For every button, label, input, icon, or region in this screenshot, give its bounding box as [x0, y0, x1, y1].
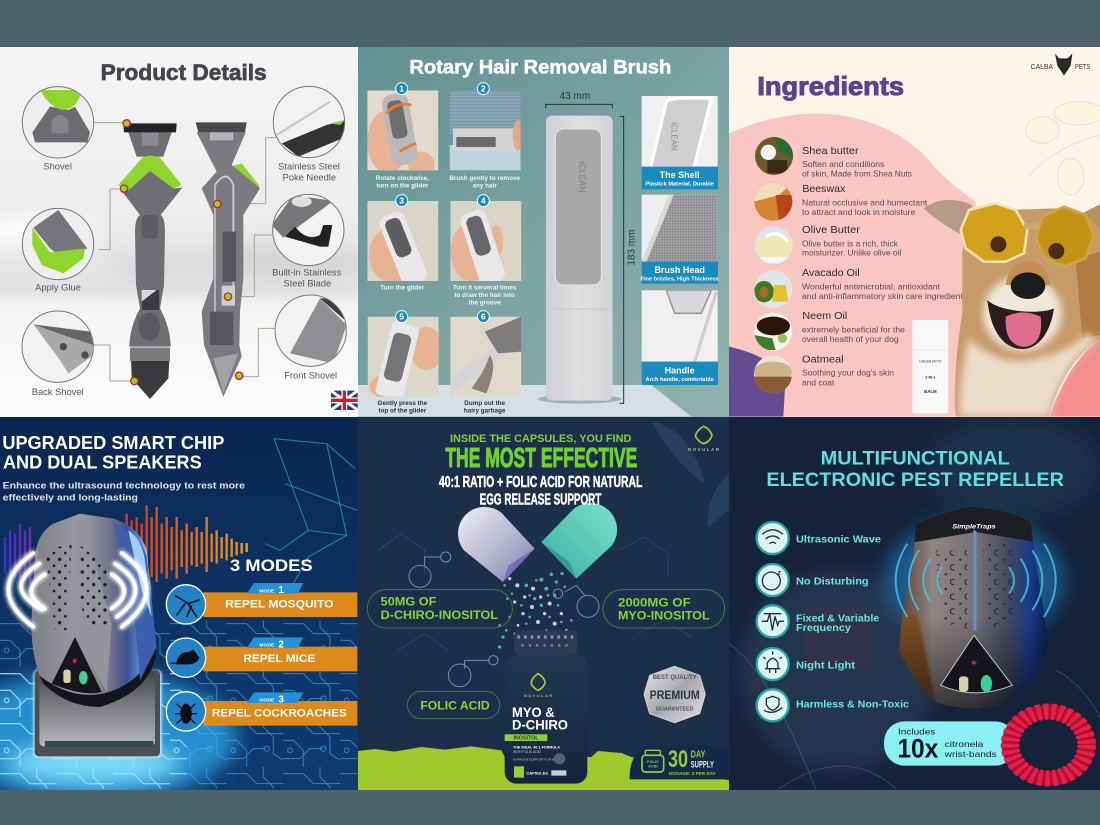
- mode 3: repel cockroaches: [166, 692, 357, 731]
- ingredient: neem oil: overall health of your dog: [802, 334, 899, 344]
- ingredient: avacado oil: Avacado Oil: [802, 268, 860, 279]
- step number badges: [396, 83, 489, 323]
- mode 1: repel mosquito: [166, 583, 357, 624]
- detail labels: Stainless Steel: [278, 161, 340, 171]
- supply badge: SUPPLY: [691, 760, 714, 770]
- stand: [33, 670, 162, 758]
- detail labels: Shovel: [43, 161, 72, 171]
- back view tool: [196, 122, 260, 397]
- bottle: HORMONE SUPPORT FOR WOMEN: [513, 757, 563, 761]
- marker dots: [120, 120, 243, 385]
- supply badge: DAY: [691, 750, 706, 761]
- ingredient: beeswax: Beeswax: [802, 184, 846, 195]
- detail labels: Front Shovel: [284, 370, 337, 380]
- premium badge: PREMIUM: [650, 688, 700, 702]
- repeller device: ✶: [70, 656, 79, 667]
- feature card: handle: Arch handle, comfortable: [646, 377, 714, 383]
- balm bottle: [912, 320, 948, 413]
- room backdrop: [729, 417, 1100, 789]
- feature: fixed and variable frequency: Fixed & Variable: [796, 614, 880, 625]
- pink background shape: [729, 114, 982, 417]
- step 2 photo: [450, 90, 523, 170]
- ingredient: olive butter: Olive Butter: [802, 225, 861, 236]
- feature: no disturbing: z: [778, 569, 782, 576]
- step numbers: 4: [481, 196, 486, 206]
- feature: no disturbing: [757, 564, 869, 596]
- subtitle: effectively and long-lasting: [3, 493, 138, 503]
- ingredient: olive butter: Olive butter is a rich, thick: [802, 238, 899, 248]
- step 3 photo: [367, 201, 438, 289]
- ingredient: shea butter: Shea butter: [802, 146, 859, 157]
- step captions: Turn it serveral times: [453, 285, 517, 292]
- feature: no disturbing: No Disturbing: [796, 576, 869, 587]
- title: multifunctional pest repeller: ELECTRONIC PEST REPELLER: [766, 470, 1064, 491]
- callout: myo-inositol: [603, 590, 725, 628]
- title: multifunctional pest repeller: MULTIFUNCTIONAL: [821, 448, 1010, 469]
- icon: uk flag: [331, 391, 358, 410]
- feature card: the shell: Plastick Material, Durable: [645, 181, 714, 187]
- sound arcs right: [112, 553, 147, 627]
- step captions: Turn the glider: [380, 285, 425, 292]
- wristband callout: wrist-bands: [943, 749, 997, 759]
- brand logo: [688, 426, 720, 452]
- ingredient: oatmeal: [754, 354, 894, 394]
- balm bottle: BALM: [924, 389, 937, 394]
- callout: folic acid: [407, 691, 500, 719]
- heading: 3 modes: 3 MODES: [230, 556, 313, 575]
- feature card: the shell: [642, 96, 718, 189]
- detail labels: Apply Glue: [35, 283, 81, 293]
- feature card: brush head: [641, 195, 720, 284]
- wristband callout: citronela: [945, 739, 984, 749]
- detail circle: shovel: [22, 87, 94, 158]
- step numbers: [399, 84, 486, 322]
- step numbers: 6: [481, 312, 486, 322]
- callout: folic acid: FOLIC ACID: [420, 699, 490, 713]
- step captions: Dump out the: [464, 400, 506, 407]
- step captions: hairy garbage: [464, 408, 506, 415]
- decorative leaves: [651, 420, 729, 527]
- wristband callout: [884, 721, 1016, 766]
- detail labels: [32, 161, 341, 397]
- mode 2: repel mice: [166, 637, 357, 677]
- connector lines: [93, 123, 277, 381]
- callout: d-chiro-inositol: [367, 590, 512, 628]
- subtitle: [3, 480, 245, 503]
- detail circle: front shovel: [275, 295, 347, 366]
- step captions: Brush gently to remove: [449, 175, 520, 182]
- main brush product: [538, 116, 621, 404]
- premium badge: [644, 666, 705, 723]
- heading: 40:1 RATIO + FOLIC ACID FOR NATURAL: [439, 474, 642, 491]
- detail labels: Steel Blade: [283, 279, 331, 289]
- red wristband coil: [1010, 712, 1087, 778]
- callout: myo-inositol: MYO-INOSITOL: [618, 609, 710, 623]
- callout: d-chiro-inositol: D-CHIRO-INOSITOL: [381, 608, 498, 622]
- detail labels: Built-in Stainless: [272, 267, 341, 277]
- premium badge: BEST QUALITY: [653, 675, 697, 681]
- molecule callout lines: [425, 557, 585, 669]
- ingredient: olive butter: moisturizer. Unlike olive oil: [802, 248, 901, 258]
- bottle: NOVULAR: [524, 693, 552, 698]
- heading: INSIDE THE CAPSULES, YOU FIND: [450, 433, 631, 445]
- feature card: handle: [642, 290, 718, 385]
- feature card: the shell: iCLEAN: [669, 122, 678, 151]
- brand logo: PETS: [1075, 62, 1090, 71]
- ingredient: beeswax: [754, 182, 928, 221]
- title: upgraded smart chip: AND DUAL SPEAKERS: [3, 451, 202, 472]
- title: upgraded smart chip: UPGRADED SMART CHIP: [2, 432, 224, 453]
- feature: harmless and non-toxic: [757, 689, 909, 721]
- ingredient: olive butter: [754, 225, 901, 264]
- feature card: brush head: Brush Head: [654, 265, 705, 275]
- step 6 photo: [450, 317, 521, 397]
- wristband callout: Includes: [898, 726, 935, 736]
- mode 3: repel cockroaches: REPEL COCKROACHES: [212, 707, 347, 719]
- device glow: [884, 517, 1064, 644]
- molecule rings: [409, 552, 599, 687]
- step captions: top of the glider: [378, 408, 427, 415]
- supply badge: [630, 745, 729, 779]
- sound wave arcs: [896, 544, 1056, 617]
- ingredient: shea butter: Soften and conditions: [802, 159, 884, 169]
- feature: fixed and variable frequency: Frequency: [796, 623, 851, 634]
- callout: myo-inositol: 2000MG OF: [618, 595, 691, 609]
- step captions: Rotate clockwise,: [376, 175, 429, 182]
- panel: ingredients: [729, 47, 1100, 417]
- panel: product details: [0, 47, 370, 417]
- heading: THE MOST EFFECTIVE: [445, 442, 637, 473]
- main brush product: iCLEAN: [577, 162, 587, 192]
- ingredient: shea butter: [754, 137, 912, 179]
- powder particles: [498, 572, 573, 649]
- mode 3: repel cockroaches: 3: [278, 694, 284, 705]
- heading: EGG RELEASE SUPPORT: [480, 492, 601, 509]
- repeller device: [31, 514, 157, 717]
- dimension: 43 mm: [546, 91, 612, 108]
- heading: [439, 433, 642, 509]
- detail circle: back shovel: [22, 311, 93, 382]
- step captions: to draw the hair into: [454, 292, 515, 299]
- panel: multifunctional pest repeller: [729, 417, 1100, 790]
- title: product details: Product Details: [101, 60, 267, 85]
- callout: d-chiro-inositol: 50MG OF: [381, 595, 436, 609]
- ingredient: oatmeal: Oatmeal: [802, 354, 844, 365]
- sound arcs left: [8, 553, 45, 627]
- step 1 photo: [367, 90, 438, 178]
- panel: capsules: [358, 417, 729, 790]
- balm bottle: 2-IN-1: [925, 375, 935, 379]
- supply badge: DOSAGE: 3 PER DAY: [669, 771, 716, 777]
- ingredient: oatmeal: Soothing your dog's skin: [802, 368, 894, 378]
- bottle: CAPSULES: [526, 770, 548, 775]
- mode 3: repel cockroaches: MODE: [259, 698, 275, 704]
- title: multifunctional pest repeller: [766, 448, 1064, 491]
- ingredient: neem oil: [754, 311, 905, 351]
- floor: [358, 385, 691, 417]
- wristband callout: 10x: [897, 734, 938, 764]
- step captions: Gently press the: [378, 400, 428, 407]
- step captions: turn on the glider: [376, 183, 429, 190]
- bottle: THE IDEAL 40:1 FORMULA: [513, 745, 560, 749]
- bottle: D-CHIRO: [512, 717, 568, 733]
- green brush stripe: [358, 746, 729, 790]
- ingredient: beeswax: to attract and look in moisture: [802, 207, 916, 217]
- dimension: 43 mm: 43 mm: [560, 91, 590, 102]
- ingredient: neem oil: Neem Oil: [802, 311, 847, 322]
- repeller device: [896, 504, 1056, 710]
- detail circle: stainless steel poke needle: [273, 86, 347, 158]
- step numbers: 1: [399, 84, 404, 94]
- step 5 photo: [368, 317, 443, 400]
- bottle: MYO &: [512, 704, 555, 720]
- ingredient: beeswax: Natural occlusive and humectant: [802, 197, 928, 207]
- title: rotary hair removal brush: Rotary Hair Removal Brush: [409, 58, 671, 79]
- panel: rotary hair removal brush: [358, 47, 729, 417]
- step numbers: 3: [399, 196, 404, 206]
- panel: upgraded smart chip: [0, 417, 358, 800]
- ingredient: avacado oil: and anti-inflammatory skin care ingredient: [802, 291, 964, 301]
- feature: night light: [757, 648, 856, 680]
- purple corner shape: [729, 347, 786, 417]
- dimension: 183 mm: [620, 116, 634, 404]
- title: ingredients: Ingredients: [757, 71, 904, 101]
- repeller device: ✶: [970, 657, 979, 669]
- feature: night light: Night Light: [796, 661, 856, 672]
- circuit board background: [0, 620, 357, 800]
- subtitle: Enhance the ultrasound technology to rest more: [3, 480, 245, 490]
- ingredient: avacado oil: Wonderful antimicrobial, antioxidant: [802, 281, 941, 291]
- step captions: the groove: [468, 299, 501, 306]
- supply badge: FOLIC: [647, 759, 659, 764]
- feature card: brush head: Fine bristles, High Thickness: [641, 276, 719, 282]
- molecule backdrop: [378, 534, 691, 650]
- step numbers: 2: [481, 84, 486, 94]
- feature: fixed and variable frequency: [757, 605, 880, 637]
- brand logo: CALBA: [1031, 62, 1053, 71]
- balm bottle: CALBA PETS: [919, 359, 942, 363]
- step 4 photo: [450, 201, 521, 287]
- ingredient: oatmeal: and coat: [802, 377, 835, 387]
- front view tool: [118, 123, 182, 399]
- feature: harmless and non-toxic: Harmless & Non-Toxic: [796, 699, 909, 710]
- premium badge: GUARANTEED: [656, 706, 694, 712]
- brand logo: [1031, 53, 1090, 76]
- sound wave bars: [5, 505, 247, 587]
- feature: ultrasonic wave: [757, 522, 881, 554]
- mode 2: repel mice: 2: [278, 639, 284, 650]
- repeller device: SimpleTraps: [952, 524, 996, 531]
- mode 1: repel mosquito: 1: [278, 585, 284, 596]
- mode 2: repel mice: MODE: [259, 643, 275, 649]
- feature card: the shell: The Shell: [660, 170, 700, 180]
- supply badge: 30: [668, 746, 688, 773]
- dimension: 183 mm: 183 mm: [627, 230, 638, 266]
- feature card: handle: Handle: [665, 366, 695, 376]
- detail labels: Back Shovel: [32, 387, 84, 397]
- ingredient: shea butter: of skin, Made from Shea Nuts: [802, 169, 912, 179]
- bottle: [505, 630, 587, 784]
- feature: ultrasonic wave: Ultrasonic Wave: [796, 535, 881, 546]
- bottle: WITH FOLIC ACID: [513, 750, 542, 754]
- brand logo: NOVULAR: [688, 447, 720, 452]
- mode 2: repel mice: REPEL MICE: [243, 653, 316, 665]
- coral corner shape: [1049, 338, 1100, 417]
- dog with sunglasses: [923, 200, 1100, 417]
- network lines: [265, 439, 357, 584]
- mode 1: repel mosquito: REPEL MOSQUITO: [225, 599, 334, 611]
- detail labels: Poke Needle: [283, 173, 336, 183]
- step numbers: 5: [399, 312, 404, 322]
- bottle: INOSITOL: [513, 736, 539, 742]
- background swooshes: [0, 218, 370, 278]
- step captions: any hair: [473, 183, 497, 190]
- ingredient: avacado oil: [754, 268, 964, 309]
- capsule halves: [458, 503, 617, 582]
- ingredient: neem oil: extremely beneficial for the: [802, 324, 905, 334]
- detail circle: apply glue: [22, 208, 94, 280]
- title: upgraded smart chip: [2, 432, 224, 472]
- detail circle: stainless steel blade: [272, 194, 344, 266]
- step captions: [376, 175, 520, 415]
- supply badge: ACID: [648, 764, 658, 769]
- mode 1: repel mosquito: MODE: [259, 588, 275, 594]
- botanical sketch: [1026, 102, 1100, 195]
